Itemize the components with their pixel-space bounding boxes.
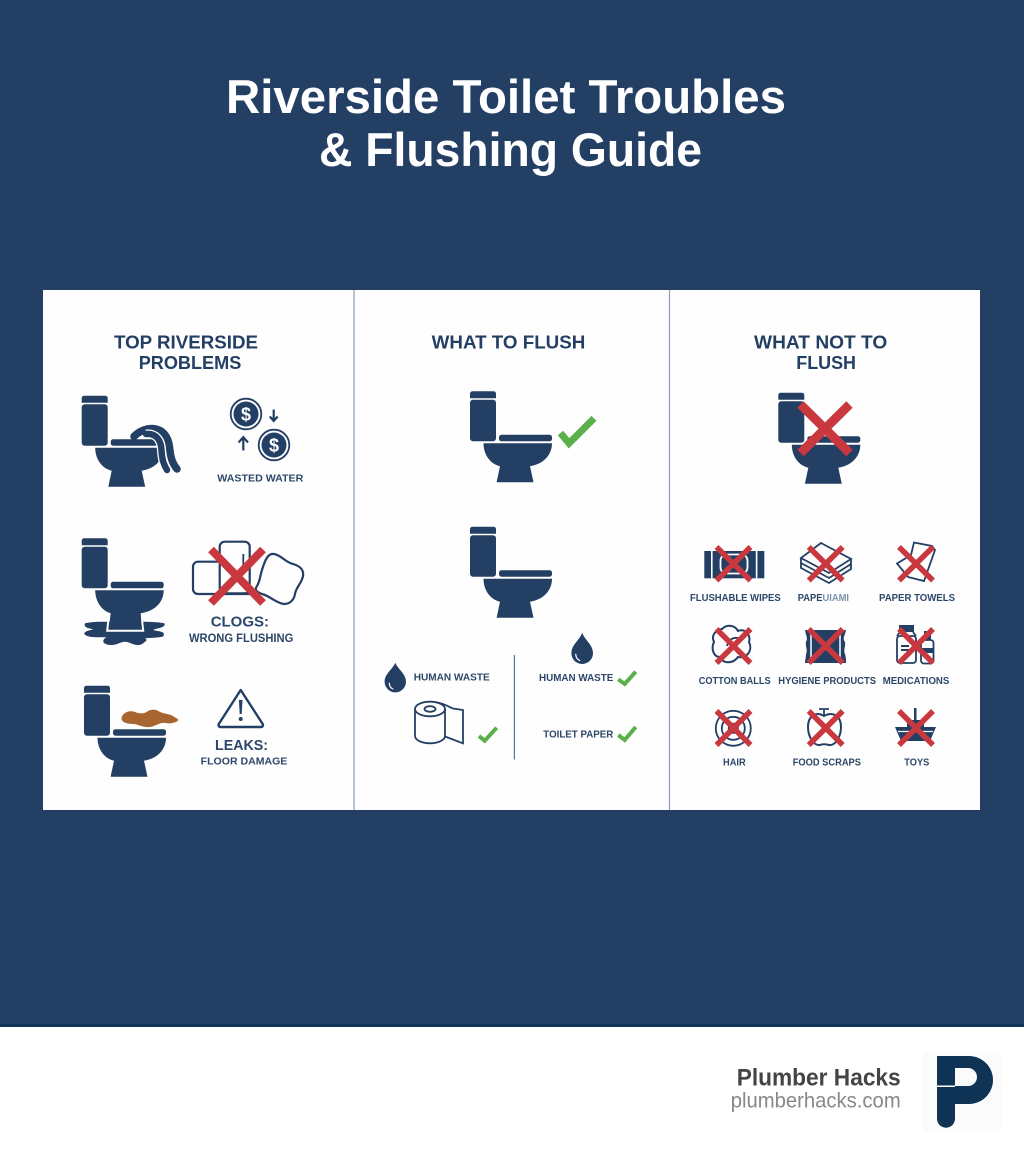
heading: what to flush: WHAT TO FLUSH [432, 332, 585, 352]
label: flushable wipes: FLUSHABLE WIPES [690, 592, 781, 604]
label: clogs wrong flushing [189, 614, 293, 645]
icon: clog items crossed out [193, 542, 303, 604]
label: garbled paper label: PAPEUIAMI [798, 592, 849, 604]
label: human waste right: HUMAN WASTE [539, 672, 613, 684]
label: paper towels: PAPER TOWELS [879, 592, 955, 604]
brand name: Plumber Hacks [737, 1065, 901, 1092]
label: human waste left: HUMAN WASTE [414, 672, 490, 684]
panel: top riverside problems [43, 290, 354, 810]
icon: medication bottles crossed out [897, 625, 934, 664]
label: leaks floor damage [201, 737, 287, 768]
label: food scraps: FOOD SCRAPS [793, 757, 861, 769]
label: toys: TOYS [904, 757, 929, 769]
footer [0, 1024, 1024, 1154]
logo: P mark [923, 1053, 1002, 1131]
label: cotton balls: COTTON BALLS [699, 675, 771, 687]
label: clogs wrong flushing: CLOGS: [211, 614, 269, 631]
icon: toilet with brown leak [84, 686, 178, 777]
heading: top riverside problems [114, 332, 258, 373]
icon: cotton balls crossed out [713, 626, 750, 663]
icon: paper towels crossed out [897, 542, 935, 581]
title: & Flushing Guide [319, 123, 702, 176]
icon: overflowing toilet [82, 396, 177, 487]
icon: toilet with floor puddle [82, 538, 165, 645]
label: toilet paper: TOILET PAPER [543, 729, 614, 741]
icon: toilet crossed out [778, 393, 860, 484]
label: wasted water: WASTED WATER [217, 473, 304, 485]
icon: check toilet paper right [618, 727, 636, 740]
heading: top riverside problems: TOP RIVERSIDE [114, 332, 258, 352]
panel: what to flush [354, 290, 670, 810]
panel: what not to flush [670, 290, 980, 810]
label: clogs wrong flushing: WRONG FLUSHING [189, 631, 293, 645]
icon: toilet [470, 527, 552, 618]
icon: napkin stack crossed out [801, 543, 851, 583]
icon: water drop right [571, 633, 593, 664]
icon: toy boat crossed out [895, 708, 936, 745]
icon: flushable wipes crossed out [704, 547, 764, 580]
icon: check human waste [618, 672, 636, 684]
label: medications: MEDICATIONS [883, 675, 949, 687]
icon: coins and arrows [231, 399, 289, 460]
title [226, 70, 786, 176]
icon: check toilet paper [479, 728, 497, 741]
heading: top riverside problems: PROBLEMS [139, 352, 241, 373]
label: hygiene products: HYGIENE PRODUCTS [778, 675, 876, 687]
icon: coins and arrows: $ [241, 404, 251, 424]
label: leaks floor damage: LEAKS: [215, 737, 268, 754]
icon: hair crossed out [716, 711, 751, 746]
heading: what not to flush [754, 332, 887, 373]
icon: toilet with check [470, 391, 594, 482]
heading: what not to flush: WHAT NOT TO [754, 332, 887, 352]
icon: toilet paper roll [415, 702, 463, 743]
label: hair: HAIR [723, 757, 746, 769]
icon: warning triangle [219, 690, 263, 727]
icon: coins and arrows: $ [269, 436, 279, 456]
icon: hygiene products crossed out [805, 629, 846, 663]
divider between lists [514, 655, 515, 760]
label: leaks floor damage: FLOOR DAMAGE [201, 756, 287, 768]
brand url: plumberhacks.com [731, 1090, 901, 1113]
title: Riverside Toilet Troubles [226, 70, 786, 123]
icon: water drop left [385, 663, 406, 692]
icon: food scraps crossed out [808, 709, 843, 745]
heading: what not to flush: FLUSH [796, 352, 856, 373]
